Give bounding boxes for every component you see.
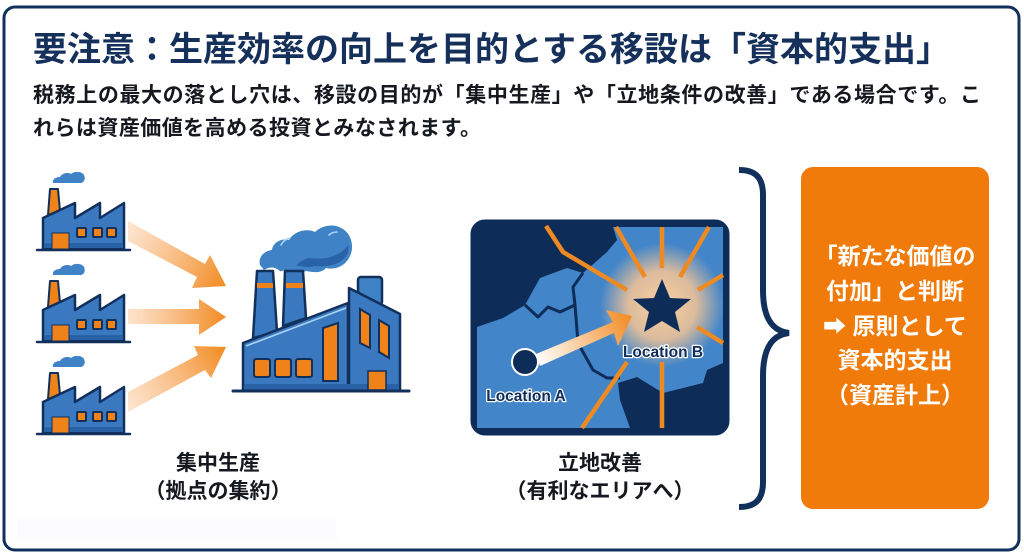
marker: location A xyxy=(512,349,538,375)
icon: star at location B xyxy=(633,279,691,332)
icon: large factory xyxy=(233,225,409,391)
conclusion text: 付加」と判断 xyxy=(826,278,964,304)
icon: small factory 2 xyxy=(37,264,130,342)
arrow: middle factory to large factory xyxy=(128,299,226,335)
arrow: top factory to large factory xyxy=(128,221,226,288)
label: consolidated production xyxy=(144,452,292,503)
intro text: れらは資産価値を高める投資とみなされます。 xyxy=(33,117,481,140)
conclusion text: ➡ 原則として xyxy=(823,313,967,339)
icon: small factory 3 xyxy=(37,356,130,434)
label: consolidated production: （拠点の集約） xyxy=(144,480,292,503)
panel: consolidated production xyxy=(37,172,409,503)
icon: small factory 1 xyxy=(37,172,130,250)
label: location improvement: （有利なエリアへ） xyxy=(506,480,694,503)
intro text: 税務上の最大の落とし穴は、移設の目的が「集中生産」や「立地条件の改善」である場合です。こ xyxy=(33,83,981,107)
label: consolidated production: 集中生産 xyxy=(176,452,260,475)
arrow: location A to location B xyxy=(536,310,632,366)
conclusion text: （資産計上） xyxy=(826,382,964,408)
map xyxy=(472,221,728,434)
icon: curly brace xyxy=(739,170,789,507)
arrow: bottom factory to large factory xyxy=(128,346,226,412)
panel: conclusion xyxy=(801,167,989,509)
label: location improvement: 立地改善 xyxy=(558,452,642,475)
label: location improvement xyxy=(506,452,694,503)
label: Location B: Location B xyxy=(623,344,703,361)
panel: location improvement xyxy=(472,221,728,503)
intro text xyxy=(33,83,981,140)
conclusion text xyxy=(814,243,976,408)
label: Location A: Location A xyxy=(486,388,566,405)
conclusion text: 「新たな価値の xyxy=(814,243,976,269)
title: 要注意：生産効率の向上を目的とする移設は「資本的支出」 xyxy=(33,31,950,69)
faint background patch xyxy=(17,519,337,541)
conclusion text: 資本的支出 xyxy=(838,347,952,373)
